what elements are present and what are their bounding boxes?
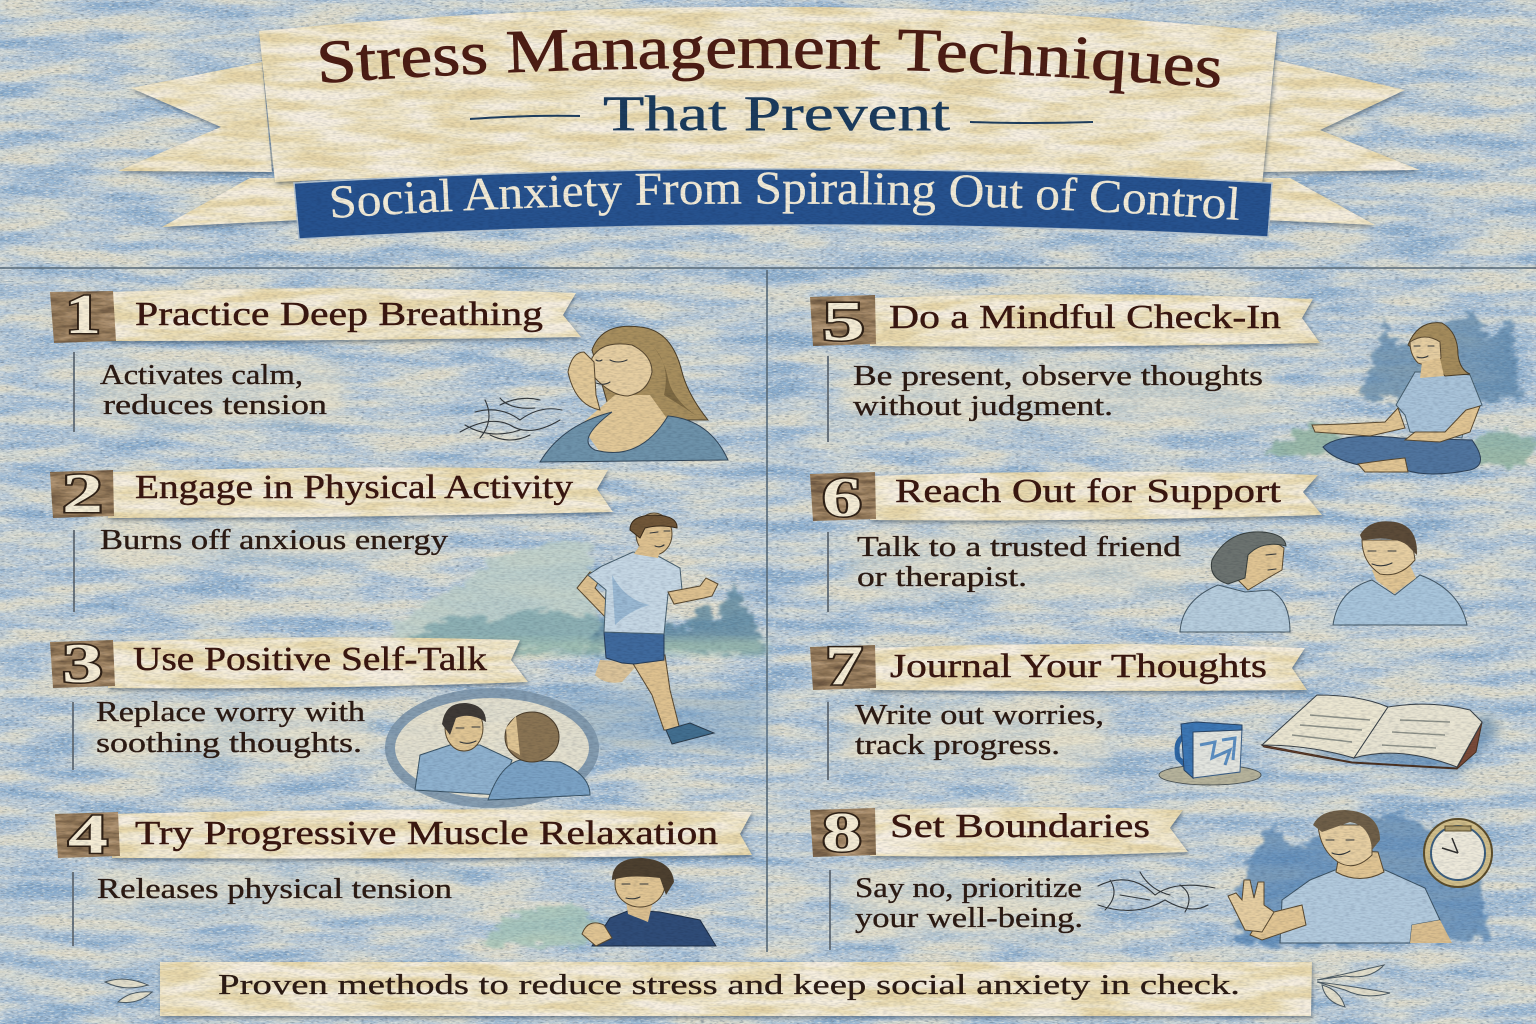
footer panel [160, 962, 1312, 1016]
face lines [1326, 840, 1354, 855]
neck [1336, 850, 1384, 878]
ribbon [870, 644, 1307, 691]
panel: item 4 [55, 804, 752, 946]
description: soothing thoughts. [96, 728, 362, 759]
foreground shrubs [410, 610, 600, 650]
body glow [845, 362, 1270, 422]
neck [625, 895, 652, 922]
number: 6 [822, 467, 862, 529]
handle [1177, 735, 1188, 768]
number box [55, 812, 120, 858]
shirt [588, 552, 682, 634]
shirt shading [612, 575, 650, 625]
subtitle rule left [470, 116, 580, 119]
grass left [1265, 424, 1340, 455]
ribbon [108, 467, 613, 518]
hair [612, 858, 674, 895]
arm [1250, 905, 1306, 940]
description [855, 873, 1083, 934]
description: reduces tension [103, 390, 327, 421]
illustration: two people in a ring [390, 693, 594, 803]
right neck [506, 716, 520, 755]
neck and chest [580, 395, 668, 452]
face [1318, 825, 1372, 866]
description [96, 697, 365, 759]
right arm [1405, 406, 1480, 442]
man hair [1360, 521, 1417, 555]
icon: mug on saucer [1159, 722, 1261, 785]
panel: item 5 [810, 291, 1536, 474]
rule [827, 532, 829, 612]
heading: Set Boundaries [890, 808, 1150, 845]
right head [505, 712, 559, 762]
description [853, 361, 1263, 422]
hands [1442, 838, 1458, 853]
left face lines [456, 727, 480, 743]
number box [50, 640, 115, 688]
heading: Practice Deep Breathing [135, 296, 543, 333]
main title: Stress Management Techniques [320, 30, 1220, 94]
breath squiggle [460, 398, 562, 440]
page lines [1292, 715, 1450, 748]
back arm [577, 572, 618, 620]
illustration: runner with landscape [395, 513, 766, 750]
left head [445, 705, 483, 751]
shirt [1280, 870, 1440, 943]
ring [390, 693, 594, 803]
number box [810, 645, 876, 690]
heading: Reach Out for Support [895, 473, 1282, 510]
description: your well-being. [855, 903, 1083, 934]
description [100, 360, 327, 421]
right shirt [488, 760, 590, 800]
description: Replace worry with [96, 697, 365, 728]
rule [72, 702, 74, 770]
man neck [1372, 565, 1416, 594]
heading: Do a Mindful Check-In [889, 299, 1281, 336]
body glow [90, 875, 460, 907]
feet [1358, 458, 1408, 472]
description: Write out worries, [855, 700, 1104, 731]
number: 3 [62, 633, 103, 695]
title banner [118, 6, 1420, 240]
hand [568, 352, 600, 410]
body glow [92, 528, 442, 558]
cream title panel [259, 7, 1277, 186]
neck [634, 545, 660, 558]
shirt [1396, 372, 1482, 438]
ribbon [108, 288, 581, 341]
legs [1323, 436, 1481, 474]
number box [810, 472, 876, 521]
trees [1360, 312, 1522, 400]
back leg [595, 660, 640, 683]
left page [1262, 695, 1388, 758]
head [636, 513, 672, 555]
heading: Journal Your Thoughts [890, 648, 1267, 685]
crown [1445, 826, 1471, 831]
rule [72, 872, 74, 946]
ribbon [112, 809, 752, 859]
panel: item 7 [810, 635, 1500, 785]
mug top and side [1181, 722, 1242, 778]
vertical divider [766, 270, 768, 952]
trees [590, 582, 766, 652]
description: track progress. [855, 730, 1060, 761]
shoe [666, 723, 714, 744]
mountains [395, 539, 600, 640]
panel: item 3 [50, 633, 594, 803]
panel: item 2 [50, 463, 766, 750]
book shadow [1300, 715, 1500, 772]
shorts [604, 632, 664, 664]
illustration: man relaxing [480, 858, 716, 946]
heading: Try Progressive Muscle Relaxation [135, 815, 718, 852]
subtitle rule right [970, 122, 1093, 123]
footer banner [105, 962, 1390, 1016]
icon: pocket watch [1424, 819, 1492, 887]
shirt [592, 910, 716, 946]
right arm [1410, 920, 1452, 943]
panel: item 6 [810, 467, 1467, 632]
illustration: man setting a boundary [1098, 810, 1492, 945]
water shading [560, 690, 766, 750]
description: Releases physical tension [97, 874, 452, 905]
hair [1408, 323, 1470, 376]
watch face [1431, 826, 1485, 880]
description: Say no, prioritize [855, 873, 1082, 904]
description: Burns off anxious energy [100, 525, 448, 556]
face [1410, 337, 1441, 365]
ribbon tails [118, 60, 1420, 227]
rule [829, 870, 831, 950]
hair [630, 515, 677, 538]
number box [50, 291, 116, 343]
body glow [850, 535, 1185, 593]
man body [1333, 575, 1467, 625]
front arm [668, 578, 718, 604]
eye and mouth [596, 360, 627, 384]
foliage [480, 904, 610, 945]
description: Be present, observe thoughts [853, 361, 1263, 392]
grass right [1470, 432, 1536, 465]
watch case [1424, 819, 1492, 887]
subtitle: That Prevent [603, 85, 950, 141]
face lines [1414, 346, 1434, 358]
body glow [848, 703, 1110, 763]
ribbon [870, 472, 1322, 520]
hair lock [646, 340, 700, 418]
shirt [540, 412, 728, 462]
trees [1235, 812, 1490, 945]
rule [827, 356, 829, 442]
squiggle [1098, 872, 1215, 912]
description [857, 532, 1181, 593]
mug body [1190, 728, 1242, 778]
face lines [622, 884, 648, 899]
illustration: woman meditating [1265, 312, 1536, 474]
number: 1 [65, 284, 101, 346]
woman face [1228, 538, 1284, 590]
footer text: Proven methods to reduce stress and keep social anxiety in check. [218, 969, 1240, 1001]
blue subtitle banner [294, 169, 1272, 239]
rule [73, 352, 75, 432]
description: Talk to a trusted friend [857, 532, 1181, 563]
body glow [848, 875, 1088, 935]
man face [1362, 540, 1415, 575]
number box [810, 295, 876, 346]
number: 4 [68, 804, 108, 866]
panel: item 8 [810, 802, 1492, 950]
number: 7 [825, 635, 863, 697]
ribbon [870, 807, 1188, 856]
mug pattern [1200, 738, 1235, 765]
right page [1354, 704, 1482, 767]
illustration: two people talking [1180, 521, 1467, 632]
saucer [1159, 765, 1261, 785]
body glow [88, 700, 373, 760]
horizontal divider [0, 267, 1536, 269]
number: 2 [62, 463, 103, 525]
number: 8 [822, 802, 862, 864]
panel: item 1 [50, 284, 728, 462]
description: Activates calm, [100, 360, 303, 391]
number box [50, 470, 114, 518]
number box [810, 808, 876, 857]
description [855, 700, 1104, 761]
heading: Engage in Physical Activity [135, 469, 573, 506]
rule [827, 702, 829, 780]
icon: leaves left [105, 979, 152, 1003]
body glow [92, 362, 342, 422]
ribbon [870, 294, 1320, 347]
neck [1420, 358, 1444, 378]
ground [400, 640, 766, 654]
icon: leaves right [1317, 965, 1390, 1007]
front leg [632, 655, 680, 730]
face lines [650, 531, 670, 547]
illustration: woman breathing [460, 326, 728, 462]
rule [73, 530, 75, 612]
hand [1228, 880, 1274, 932]
icon: open book [1262, 695, 1500, 772]
left hair [442, 703, 486, 735]
face [591, 344, 652, 396]
left arm [1312, 408, 1405, 436]
ribbon [108, 637, 528, 688]
hair [592, 326, 708, 420]
face [615, 861, 665, 907]
heading: Use Positive Self-Talk [133, 641, 487, 678]
book cover [1262, 722, 1482, 769]
woman body [1180, 585, 1290, 632]
raised hand [582, 923, 612, 946]
left shirt [415, 745, 512, 795]
woman face lines [1266, 554, 1276, 570]
banner text: Social Anxiety From Spiraling Out of Control [332, 171, 1239, 220]
number: 5 [822, 291, 865, 353]
woman hair [1211, 532, 1286, 584]
hair [1313, 810, 1380, 850]
description: or therapist. [857, 562, 1027, 593]
man face lines [1368, 551, 1396, 566]
description: without judgment. [853, 391, 1113, 422]
